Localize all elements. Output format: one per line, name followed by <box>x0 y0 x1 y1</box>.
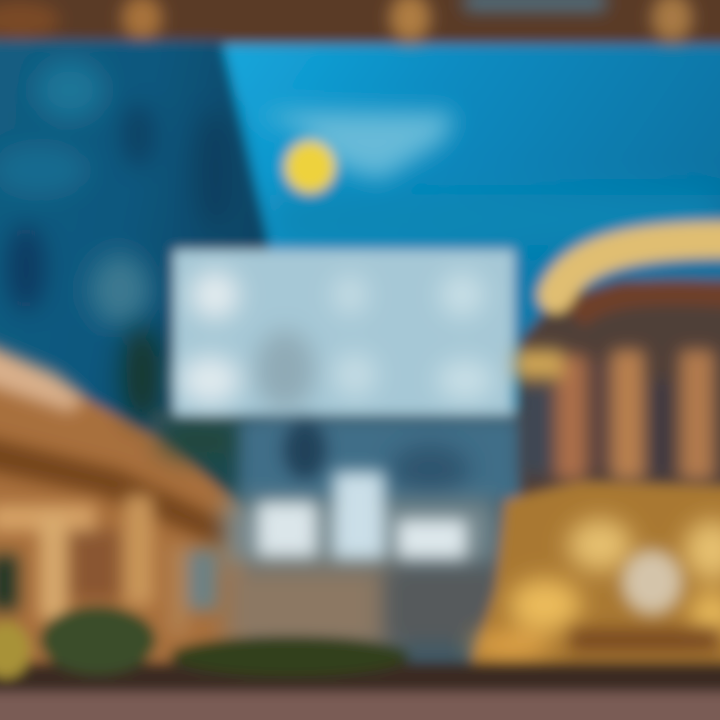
building windows <box>0 60 237 326</box>
lower central scene <box>225 420 520 650</box>
white blocks <box>258 472 466 558</box>
golden dome <box>556 240 720 295</box>
hedges and ground <box>0 606 720 720</box>
palm foliage <box>122 327 242 458</box>
sun and cloud <box>255 112 455 193</box>
right golden building <box>465 240 720 680</box>
lower middle backdrop <box>150 410 530 695</box>
sky <box>222 30 720 350</box>
left tan building <box>0 335 250 680</box>
left blue building <box>0 40 268 450</box>
top wooden band <box>0 0 720 44</box>
columns <box>514 350 714 480</box>
columns <box>0 495 218 635</box>
central translucent panel <box>174 250 514 415</box>
lit base <box>465 482 720 680</box>
panel highlights <box>180 271 493 410</box>
